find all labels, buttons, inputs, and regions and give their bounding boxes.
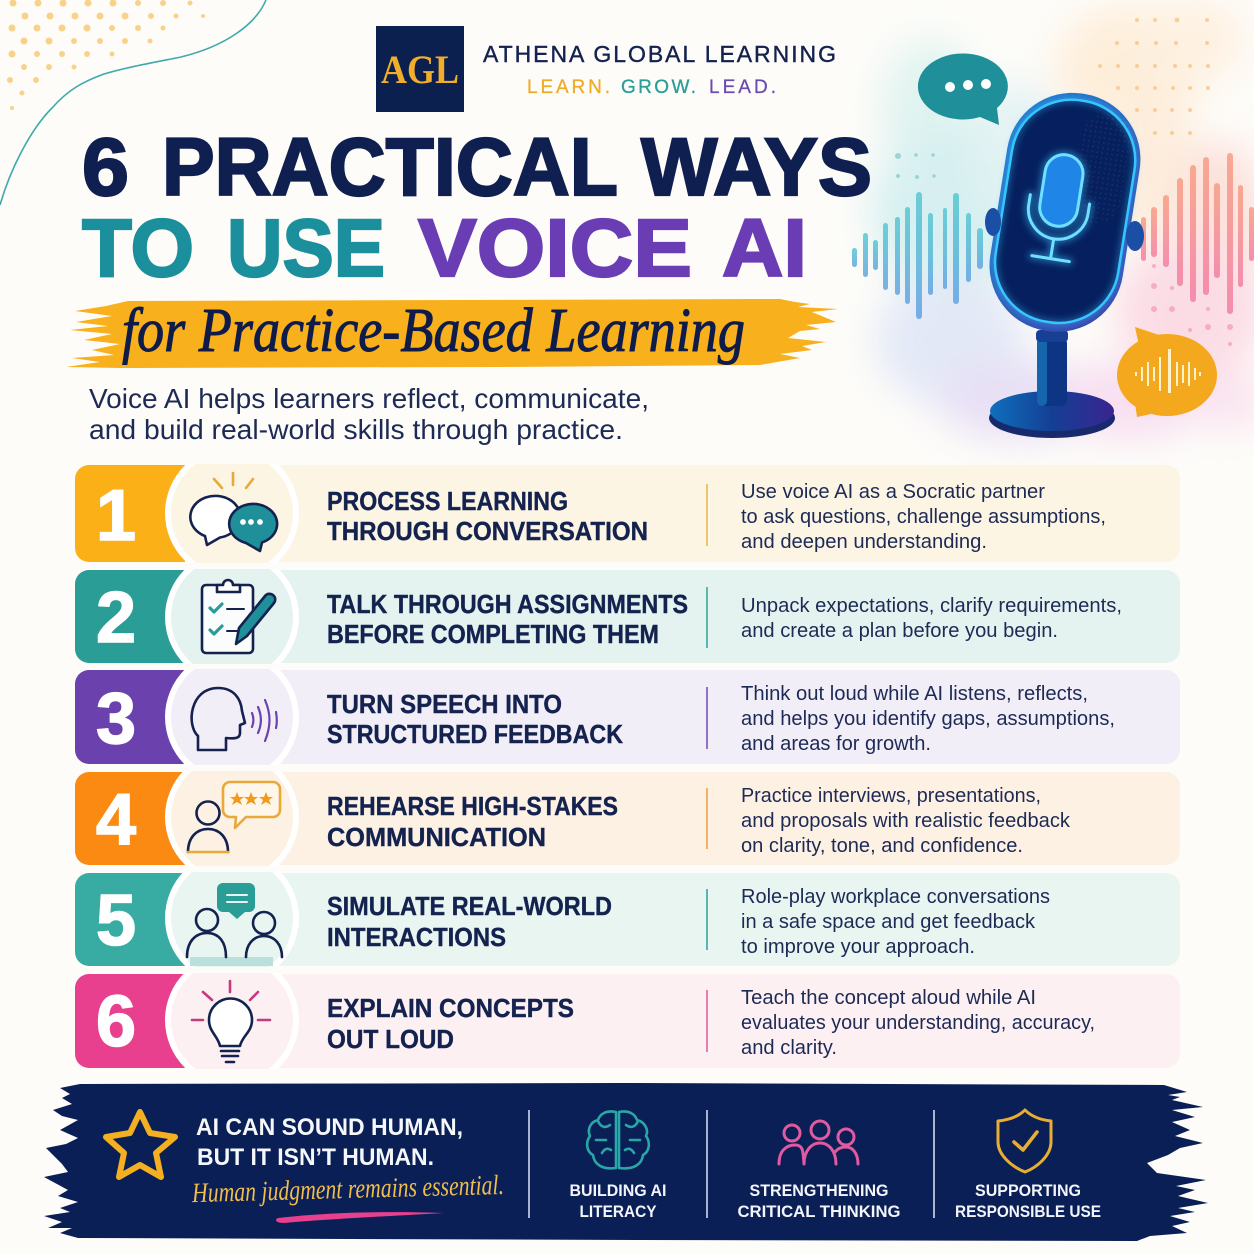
banner script text: for Practice-Based Learning <box>122 297 745 365</box>
title: VOICE <box>418 203 692 294</box>
description: evaluates your understanding, accuracy, <box>741 1012 1095 1034</box>
description: Use voice AI as a Socratic partner <box>741 481 1045 503</box>
description: Teach the concept aloud while AI <box>741 987 1036 1009</box>
row 2 <box>75 569 1180 664</box>
label: supporting responsible use <box>955 1181 1101 1221</box>
title: AI <box>722 203 807 294</box>
description <box>741 987 1095 1059</box>
row background <box>75 465 1180 562</box>
description <box>741 595 1122 642</box>
icon circle <box>165 872 299 967</box>
description: on clarity, tone, and confidence. <box>741 835 1023 857</box>
row 1 <box>75 464 1180 563</box>
description: Think out loud while AI listens, reflects, <box>741 683 1088 705</box>
heading: PROCESS LEARNING <box>327 486 568 516</box>
description: in a safe space and get feedback <box>741 911 1036 933</box>
number block: 1 <box>96 476 136 556</box>
label: supporting responsible use: SUPPORTING <box>975 1181 1081 1200</box>
title: TO <box>82 203 194 294</box>
heading: THROUGH CONVERSATION <box>327 516 648 546</box>
side knobs <box>985 208 1144 251</box>
icon: clipboard and pen <box>202 580 275 653</box>
description <box>741 481 1106 553</box>
heading: SIMULATE REAL-WORLD <box>327 891 612 921</box>
callout text: BUT IT ISN’T HUMAN. <box>197 1144 434 1171</box>
decorative dots top left <box>7 0 205 110</box>
sound wave right <box>1141 153 1254 314</box>
row background <box>75 974 1180 1068</box>
icon: people <box>779 1121 858 1164</box>
icon: shield <box>998 1110 1051 1172</box>
heading <box>327 791 618 852</box>
microphone illustration <box>980 83 1150 438</box>
number block <box>75 670 185 764</box>
number block <box>75 974 185 1068</box>
logo <box>376 26 464 112</box>
title: 6 <box>82 122 129 213</box>
sound wave left <box>852 192 983 319</box>
brand name and tagline: ATHENA GLOBAL LEARNING <box>483 41 836 67</box>
icon: speaking head <box>192 688 277 750</box>
heading: BEFORE COMPLETING THEM <box>327 619 659 649</box>
intro text <box>89 383 649 445</box>
heading: TURN SPEECH INTO <box>327 689 562 719</box>
label: building AI literacy: LITERACY <box>580 1202 657 1221</box>
heading <box>327 993 574 1054</box>
description: Role-play workplace conversations <box>741 886 1050 908</box>
row background <box>75 873 1180 966</box>
number block: 5 <box>96 881 136 961</box>
number block: 3 <box>96 679 136 759</box>
icon: two people and speech bubble <box>187 883 282 957</box>
number block: 4 <box>96 780 136 860</box>
icon circle <box>165 464 299 563</box>
title: USE <box>227 203 385 294</box>
bubble: yellow sound <box>1117 327 1217 417</box>
description: and areas for growth. <box>741 733 931 755</box>
heading <box>327 891 612 952</box>
row 6 <box>75 973 1180 1069</box>
row background <box>75 570 1180 663</box>
heading: TALK THROUGH ASSIGNMENTS <box>327 589 688 619</box>
description: and proposals with realistic feedback <box>741 810 1071 832</box>
title: PRACTICAL <box>162 122 618 213</box>
bubble: teal speech <box>918 53 1008 125</box>
description: to improve your approach. <box>741 936 975 958</box>
description: Unpack expectations, clarify requirements, <box>741 595 1122 617</box>
callout text: AI CAN SOUND HUMAN, <box>196 1114 463 1141</box>
icon circle <box>165 771 299 866</box>
decorative curve <box>0 0 266 205</box>
mic stand <box>989 330 1115 438</box>
description: and create a plan before you begin. <box>741 620 1058 642</box>
icon: light bulb <box>192 981 270 1062</box>
heading: REHEARSE HIGH-STAKES <box>327 791 618 821</box>
description <box>741 886 1050 958</box>
description: and helps you identify gaps, assumptions, <box>741 708 1115 730</box>
footer panel <box>44 1083 1208 1241</box>
row 3 <box>75 669 1180 765</box>
callout text <box>196 1114 463 1171</box>
mic head <box>980 83 1150 341</box>
heading <box>327 589 688 649</box>
mic glyph <box>1021 150 1097 263</box>
title: WAYS <box>641 122 872 213</box>
label: building AI literacy <box>570 1181 666 1221</box>
brand name and tagline: LEAD. <box>709 77 776 98</box>
decorative dots lower right <box>1151 264 1233 346</box>
icon: speech bubbles <box>190 473 277 551</box>
description <box>741 785 1071 857</box>
decorative dots top right <box>1098 18 1210 135</box>
decorative watercolor wash <box>870 0 1254 440</box>
script note: Human judgment remains essential. <box>191 1170 504 1209</box>
heading: STRUCTURED FEEDBACK <box>327 719 623 749</box>
brand name and tagline: LEARN. <box>527 77 610 98</box>
description: to ask questions, challenge assumptions, <box>741 506 1106 528</box>
footer brush background <box>44 1083 1208 1241</box>
heading <box>327 689 623 749</box>
divider lines <box>528 1110 935 1218</box>
label: supporting responsible use: RESPONSIBLE USE <box>955 1202 1101 1221</box>
heading: EXPLAIN CONCEPTS <box>327 993 574 1023</box>
heading <box>327 486 648 546</box>
number block <box>75 570 185 663</box>
icon circle <box>165 669 299 765</box>
number block <box>75 465 185 562</box>
pink underline <box>276 1212 444 1223</box>
icon circle <box>165 973 299 1069</box>
icon: brain <box>587 1111 649 1168</box>
heading: COMMUNICATION <box>327 822 546 852</box>
icon: person with star rating <box>188 782 280 852</box>
intro text: Voice AI helps learners reflect, communicate, <box>89 383 649 414</box>
row background <box>75 670 1180 764</box>
intro text: and build real-world skills through practice. <box>89 414 623 445</box>
brand name and tagline: GROW. <box>621 77 696 98</box>
row 5 <box>75 872 1180 967</box>
title <box>82 122 872 294</box>
banner brush stroke <box>66 299 838 368</box>
row 4 <box>75 771 1180 866</box>
logo: AGL <box>381 47 459 92</box>
brand name and tagline <box>483 41 836 98</box>
number block: 2 <box>96 578 136 658</box>
row background <box>75 772 1180 865</box>
label: strengthening critical thinking: STRENGTHENING <box>750 1181 888 1200</box>
label: strengthening critical thinking <box>738 1181 900 1221</box>
label: strengthening critical thinking: CRITICAL THINKING <box>738 1202 900 1221</box>
description: Practice interviews, presentations, <box>741 785 1041 807</box>
heading: INTERACTIONS <box>327 922 506 952</box>
label: building AI literacy: BUILDING AI <box>570 1181 666 1200</box>
number block: 6 <box>96 982 136 1062</box>
number block <box>75 873 185 966</box>
decorative dots left of mic <box>895 153 936 179</box>
description: and clarity. <box>741 1037 837 1059</box>
description <box>741 683 1115 755</box>
icon: star <box>106 1112 175 1177</box>
icon circle <box>165 569 299 664</box>
description: and deepen understanding. <box>741 531 987 553</box>
number block <box>75 772 185 865</box>
heading: OUT LOUD <box>327 1024 454 1054</box>
